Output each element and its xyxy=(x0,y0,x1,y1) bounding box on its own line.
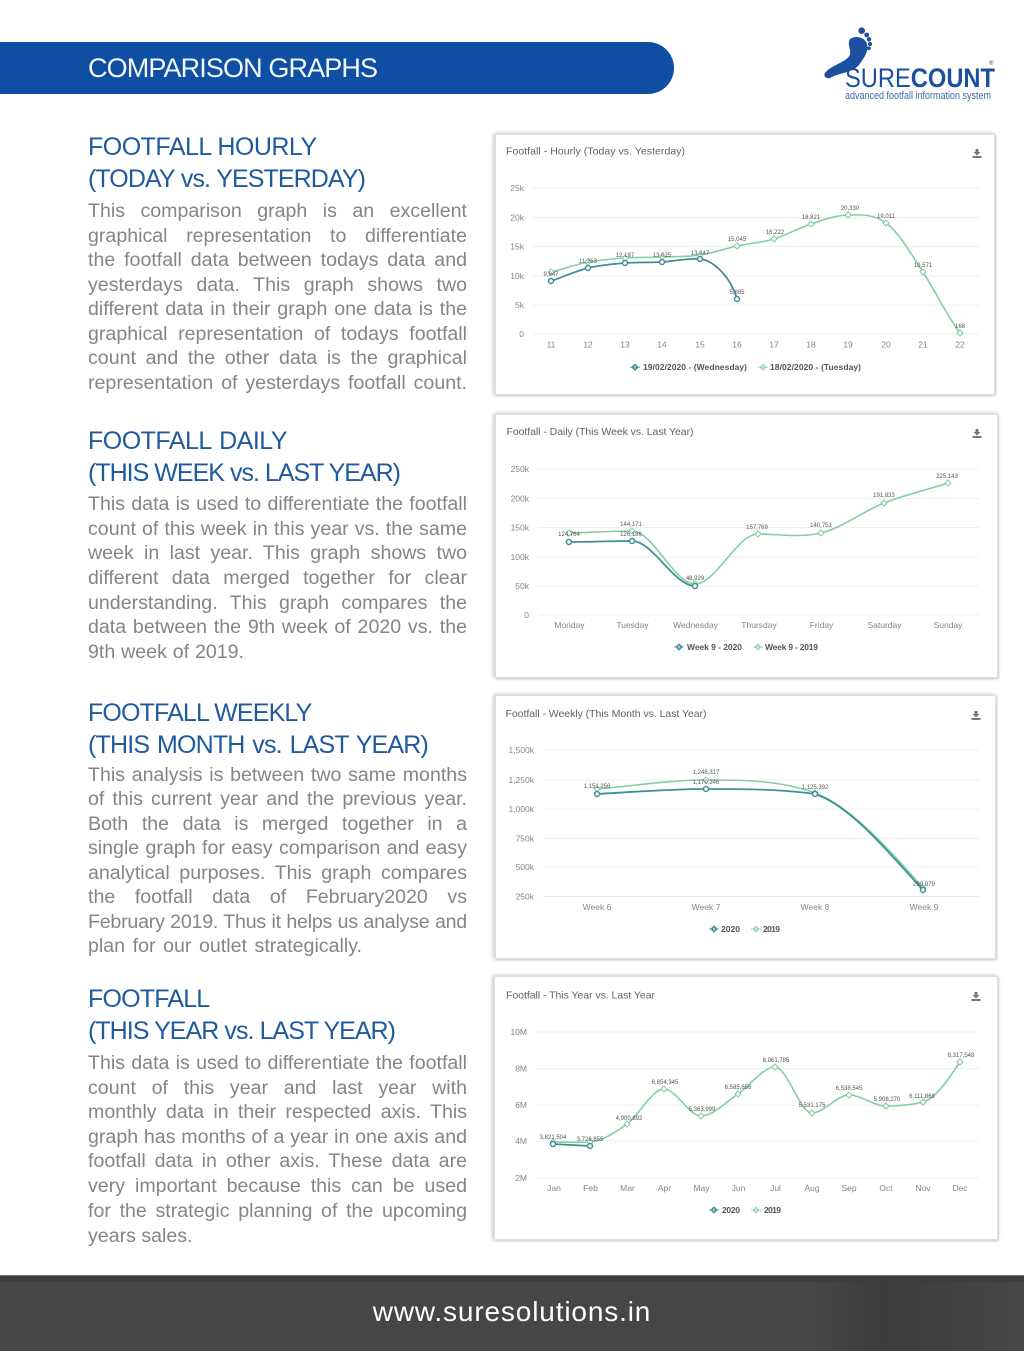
panel: weekly chart xyxy=(495,695,996,959)
x axis labels: 16 xyxy=(732,340,742,350)
x axis labels: Feb xyxy=(583,1183,598,1193)
data labels: 191,833 xyxy=(873,493,896,499)
series: 19/02/2020 xyxy=(548,256,740,302)
y axis: 100k xyxy=(511,552,530,562)
x axis labels: Nov xyxy=(915,1183,931,1193)
series: 2019 xyxy=(550,1059,963,1145)
y axis: 1,000k xyxy=(508,804,535,814)
data labels: 9,847 xyxy=(543,272,559,278)
y axis: 150k xyxy=(511,522,530,532)
header bar xyxy=(0,42,674,94)
text block: footfall weekly xyxy=(88,699,467,957)
series: 2020 xyxy=(550,1142,592,1148)
x axis labels: 18 xyxy=(806,340,816,350)
heading: footfall daily: (THIS WEEK vs. LAST YEAR) xyxy=(88,459,400,487)
data labels: 1,170,246 xyxy=(693,780,720,786)
x axis labels: Friday xyxy=(810,620,834,630)
data labels: 1,248,317 xyxy=(693,770,720,776)
line chart: yearly xyxy=(506,990,980,1215)
x axis labels: Sep xyxy=(841,1183,857,1193)
series: week 9 2020 xyxy=(566,538,698,588)
y axis: 250k xyxy=(516,892,535,902)
x axis labels: Oct xyxy=(879,1183,893,1193)
data labels: 5,363,999 xyxy=(689,1107,716,1113)
data labels: 19,011 xyxy=(877,214,896,220)
body text: yearly: graph has months of a year in one axis and xyxy=(88,1126,467,1148)
body text: yearly: monthly data in their respected axis. This xyxy=(88,1101,467,1123)
x axis labels: Monday xyxy=(554,620,585,630)
body text: yearly: very important because this can be used xyxy=(88,1175,467,1197)
series: 2019 xyxy=(594,777,926,891)
panel: daily chart xyxy=(495,414,998,678)
line chart: hourly xyxy=(506,146,982,372)
body text: hourly: the footfall data between todays data and xyxy=(88,249,467,271)
y axis: 0 xyxy=(524,610,529,620)
legend: 19/02/2020 - (Wednesday) xyxy=(643,362,747,372)
data labels: 168 xyxy=(955,324,966,330)
data labels: 6,538,545 xyxy=(836,1086,863,1092)
footer website: www.suresolutions.in xyxy=(373,1296,651,1327)
data labels: 299,879 xyxy=(913,882,936,888)
y axis: 0 xyxy=(519,329,524,339)
data labels: 8,317,548 xyxy=(948,1053,975,1059)
body text: weekly: of this current year and the previous year. xyxy=(88,788,467,810)
x axis labels xyxy=(554,620,963,630)
y axis: 10k xyxy=(510,271,525,281)
text block: footfall daily xyxy=(88,427,467,663)
data labels: 157,769 xyxy=(746,525,768,531)
legend: 2020 xyxy=(721,924,740,934)
y axis: 1,500k xyxy=(508,745,535,755)
body text: daily xyxy=(88,493,467,663)
data labels: 48,929 xyxy=(686,576,705,582)
title: COMPARISON GRAPHS xyxy=(88,53,377,83)
y axis: 200k xyxy=(511,494,530,504)
body text: hourly: graphical representation to differentiate xyxy=(88,224,467,246)
body text: weekly: plan for our outlet strategically. xyxy=(88,935,362,957)
data labels: 1,125,392 xyxy=(802,785,829,791)
x axis labels: Apr xyxy=(658,1183,671,1193)
logo: surecount xyxy=(824,27,995,102)
x axis labels: Week 7 xyxy=(692,902,721,912)
data labels: 225,143 xyxy=(936,474,958,480)
legend: 2019 xyxy=(763,924,780,934)
body text: daily: different data merged together for clear xyxy=(88,567,467,589)
body text: hourly xyxy=(88,200,467,394)
body text: daily: This data is used to differentiate the footfall xyxy=(88,493,467,515)
body text: daily: count of this week in this year vs. the same xyxy=(88,518,467,540)
x axis labels: Aug xyxy=(804,1183,820,1193)
body text: daily: understanding. This graph compares the xyxy=(88,592,467,614)
body text: weekly xyxy=(88,764,467,957)
body text: yearly xyxy=(88,1052,467,1247)
heading: footfall weekly: (THIS MONTH vs. LAST YEAR) xyxy=(88,731,428,759)
x axis labels: Jul xyxy=(770,1183,781,1193)
body text: weekly: single graph for easy comparison and easy xyxy=(88,837,467,859)
body text: daily: data between the 9th week of 2020 vs. the xyxy=(88,616,467,638)
body text: hourly: different data in their graph one data is the xyxy=(88,298,467,320)
chart title: Footfall - Weekly (This Month vs. Last Year) xyxy=(506,708,706,720)
panel: hourly chart xyxy=(495,134,995,395)
data labels: 5,531,175 xyxy=(799,1103,826,1109)
y axis: 2M xyxy=(515,1173,527,1183)
data labels: 12,187 xyxy=(616,253,635,259)
x axis labels: 15 xyxy=(695,340,705,350)
legend: 2019 xyxy=(764,1205,781,1215)
x axis labels: Thursday xyxy=(741,620,777,630)
legend xyxy=(709,924,780,934)
data labels xyxy=(558,474,958,582)
heading: footfall hourly xyxy=(88,133,365,193)
data labels: 140,751 xyxy=(810,523,832,529)
y axis: 250k xyxy=(511,464,530,474)
data labels: 18,821 xyxy=(802,215,821,221)
body text: yearly: years sales. xyxy=(88,1225,193,1247)
x axis labels: 17 xyxy=(769,340,779,350)
y axis: 1,250k xyxy=(508,775,535,785)
y axis: 6M xyxy=(515,1100,527,1110)
body text: hourly: representation of yesterdays footfall count. xyxy=(88,372,467,394)
x axis labels: Week 8 xyxy=(801,902,830,912)
icon: download xyxy=(972,992,980,1001)
x axis labels: Week 9 xyxy=(910,902,939,912)
body text: yearly: for the strategic planning of the upcoming xyxy=(88,1200,467,1222)
data labels: 15,045 xyxy=(728,237,747,243)
body text: yearly: footfall data in other axis. These data are xyxy=(88,1150,467,1172)
registered mark: ® xyxy=(989,60,994,67)
x axis labels: 19 xyxy=(843,340,853,350)
data labels: 13,247 xyxy=(691,251,710,257)
series: week 9 2019 xyxy=(566,480,951,587)
panel: yearly chart xyxy=(494,976,998,1240)
x axis labels: May xyxy=(693,1183,710,1193)
body text: hourly: This comparison graph is an excellent xyxy=(88,200,467,222)
body text: daily: 9th week of 2019. xyxy=(88,641,244,663)
data labels: 1,151,256 xyxy=(584,784,611,790)
logo wordmark: SURECOUNT xyxy=(845,63,995,93)
y axis xyxy=(510,1027,979,1183)
data labels: 8,061,785 xyxy=(763,1058,790,1064)
x axis labels: Sunday xyxy=(934,620,963,630)
heading: footfall hourly: FOOTFALL HOURLY xyxy=(88,133,317,161)
data labels: 6,111,868 xyxy=(909,1094,936,1100)
legend: Week 9 - 2019 xyxy=(765,642,818,652)
body text: weekly: analytical purposes. This graph compares xyxy=(88,862,467,884)
heading: footfall weekly xyxy=(88,699,428,759)
heading: footfall weekly: FOOTFALL WEEKLY xyxy=(88,699,311,727)
data labels: 3,821,504 xyxy=(540,1135,567,1141)
body text: hourly: graphical representation of todays footfall xyxy=(88,323,467,345)
icon: download xyxy=(972,711,980,720)
legend xyxy=(630,362,861,372)
series: 18/02/2020 xyxy=(548,212,963,336)
data labels: 144,171 xyxy=(620,522,642,528)
x axis labels xyxy=(583,902,939,912)
chart title: Footfall - Daily (This Week vs. Last Year) xyxy=(506,426,694,438)
y axis: 500k xyxy=(516,862,535,872)
body text: weekly: Both the data is merged together in a xyxy=(88,813,467,835)
x axis labels xyxy=(547,1183,968,1193)
y axis xyxy=(510,183,979,339)
x axis labels: 11 xyxy=(547,340,556,350)
x axis labels: 21 xyxy=(918,340,928,350)
body text: hourly: count and the other data is the graphical xyxy=(88,347,467,369)
x axis labels: 12 xyxy=(583,340,593,350)
x axis labels: Week 6 xyxy=(583,902,612,912)
data labels: 20,330 xyxy=(841,206,860,212)
data labels: 13,025 xyxy=(653,253,672,259)
body text: yearly: count of this year and last year with xyxy=(88,1077,467,1099)
footer xyxy=(0,1275,1024,1351)
heading: footfall daily: FOOTFALL DAILY xyxy=(88,427,287,455)
data labels: 10,571 xyxy=(914,263,933,269)
heading: footfall hourly: (TODAY vs. YESTERDAY) xyxy=(88,165,365,193)
body text: daily: week in last year. This graph shows two xyxy=(88,542,467,564)
y axis: 750k xyxy=(516,834,535,844)
y axis: 8M xyxy=(515,1064,527,1074)
x axis labels: Wednesday xyxy=(673,620,719,630)
heading: footfall yearly: (THIS YEAR vs. LAST YEAR) xyxy=(88,1017,395,1045)
y axis: 5k xyxy=(515,300,525,310)
legend: 2020 xyxy=(722,1205,740,1215)
icon: footprint xyxy=(824,27,872,78)
x axis labels: Tuesday xyxy=(616,620,649,630)
data labels: 6,585,656 xyxy=(725,1085,752,1091)
y axis: 50k xyxy=(515,581,530,591)
data labels: 126,186 xyxy=(620,532,642,538)
x axis labels: 14 xyxy=(657,340,667,350)
text block: footfall hourly xyxy=(88,133,467,394)
legend: 18/02/2020 - (Tuesday) xyxy=(770,362,861,372)
line chart: weekly xyxy=(506,708,980,934)
data labels: 4,900,892 xyxy=(616,1116,643,1122)
data labels xyxy=(584,770,936,888)
legend xyxy=(709,1205,781,1215)
body text: yearly: This data is used to differentiate the footfall xyxy=(88,1052,467,1074)
x axis labels: Saturday xyxy=(867,620,902,630)
data labels: 3,726,855 xyxy=(577,1137,604,1143)
body text: weekly: the footfall data of February2020 vs xyxy=(88,886,467,908)
icon: download xyxy=(972,429,982,438)
data labels xyxy=(543,206,966,330)
x axis labels: Jan xyxy=(547,1183,561,1193)
text block: footfall yearly xyxy=(88,985,467,1247)
chart title: Footfall - This Year vs. Last Year xyxy=(506,990,656,1002)
body text: hourly: yesterdays data. This graph shows two xyxy=(88,274,467,296)
x axis labels: 22 xyxy=(955,340,965,350)
x axis labels: Dec xyxy=(952,1183,968,1193)
y axis: 10M xyxy=(510,1027,527,1037)
y axis: 25k xyxy=(510,183,525,193)
chart title: Footfall - Hourly (Today vs. Yesterday) xyxy=(506,146,685,158)
body text: weekly: February 2019. Thus it helps us analyse and xyxy=(88,911,467,933)
legend: Week 9 - 2020 xyxy=(687,642,742,652)
y axis xyxy=(508,745,979,902)
footer band xyxy=(0,1276,1024,1282)
x axis labels: 20 xyxy=(881,340,891,350)
line chart: daily xyxy=(506,426,982,652)
y axis: 15k xyxy=(510,242,525,252)
x axis labels xyxy=(547,340,965,350)
heading: footfall daily xyxy=(88,427,400,487)
series: 2020 xyxy=(594,786,926,892)
data labels: 11,253 xyxy=(579,259,598,265)
x axis labels: 13 xyxy=(620,340,630,350)
heading: footfall yearly xyxy=(88,985,395,1045)
data labels: 124,764 xyxy=(558,532,580,538)
y axis xyxy=(511,464,979,620)
data labels: 16,222 xyxy=(766,230,785,236)
data labels: 5,908,270 xyxy=(874,1097,901,1103)
logo tagline: advanced footfall information system xyxy=(845,90,991,102)
data labels: 6,854,345 xyxy=(652,1080,679,1086)
icon: download xyxy=(972,149,982,158)
heading: footfall yearly: FOOTFALL xyxy=(88,985,209,1013)
y axis: 4M xyxy=(515,1136,527,1146)
data labels: 5,885 xyxy=(729,290,745,296)
x axis labels: Mar xyxy=(620,1183,635,1193)
body text: weekly: This analysis is between two same months xyxy=(88,764,467,786)
legend xyxy=(674,642,818,652)
y axis: 20k xyxy=(510,212,525,222)
data labels xyxy=(540,1053,975,1143)
x axis labels: Jun xyxy=(732,1183,746,1193)
